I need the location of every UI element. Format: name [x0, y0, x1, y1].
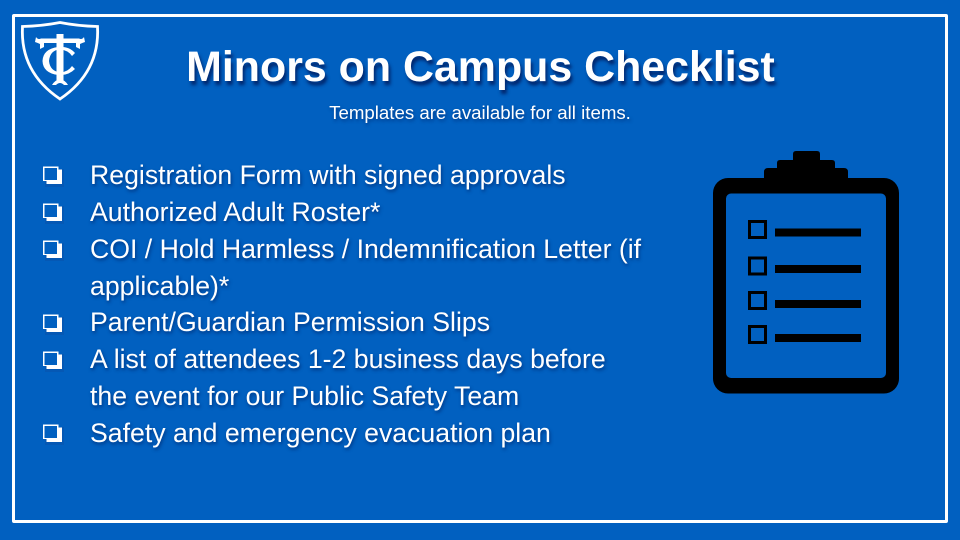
checklist text line: registration form: Registration Form with signed approvals	[90, 160, 566, 190]
checklist text line: adult roster: Authorized Adult Roster*	[90, 197, 380, 227]
checklist text line: list of attendees continued: the event for our Public Safety Team	[90, 381, 519, 411]
checkbox bullets	[43, 166, 64, 445]
title: Minors on Campus Checklist	[186, 43, 775, 91]
subtitle: Templates are available for all items.	[329, 102, 631, 123]
checklist text line: list of attendees: A list of attendees 1-2 business days before	[90, 344, 606, 374]
checklist text line: COI letter: COI / Hold Harmless / Indemnification Letter (if	[90, 234, 641, 264]
checklist text line: permission slips: Parent/Guardian Permission Slips	[90, 307, 490, 337]
icon: shield logo	[20, 21, 100, 101]
icon: clipboard	[713, 151, 899, 394]
checklist text line: safety plan: Safety and emergency evacuation plan	[90, 418, 551, 448]
checklist text line: COI letter continued: applicable)*	[90, 271, 229, 301]
